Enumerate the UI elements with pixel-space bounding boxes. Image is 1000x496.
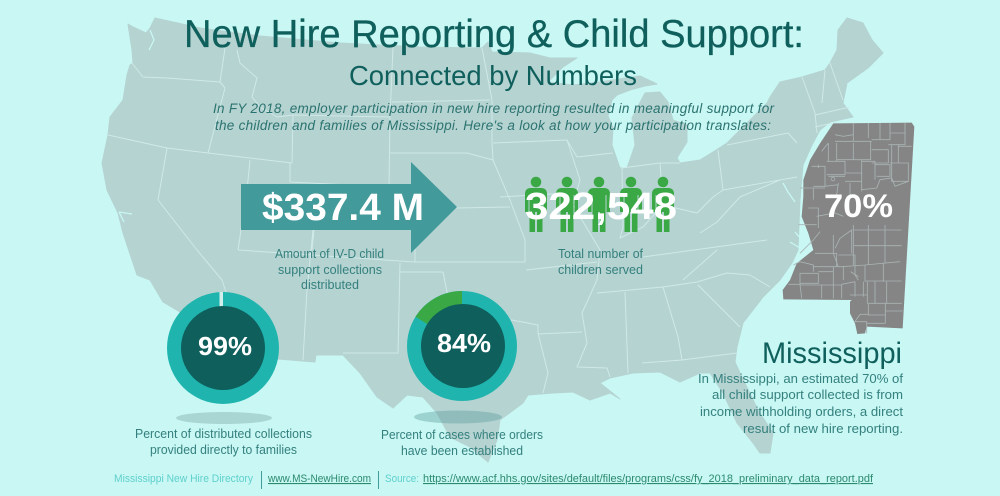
- intro text: the children and families of Mississippi. Here's a look at how your participation translates:: [215, 118, 771, 133]
- Mississippi state map: [783, 123, 914, 334]
- donut 99 label: provided directly to families: [150, 443, 297, 457]
- footer: Source:: [385, 473, 419, 485]
- Mississippi description: result of new hire reporting.: [743, 422, 903, 436]
- footer: [114, 471, 874, 489]
- collections label: distributed: [301, 278, 359, 292]
- donut 84 percent: [407, 291, 517, 424]
- collections label: support collections: [278, 263, 382, 277]
- donut 99 label: Percent of distributed collections: [135, 427, 312, 441]
- US map background: [102, 18, 883, 462]
- footer: Mississippi New Hire Directory: [114, 473, 253, 485]
- Mississippi heading: Mississippi: [762, 337, 902, 370]
- donut 84 label: Percent of cases where orders: [381, 428, 543, 442]
- children served label: [558, 247, 644, 277]
- Mississippi description: In Mississippi, an estimated 70% of: [698, 372, 904, 386]
- icon: five people: [525, 177, 674, 232]
- title: New Hire Reporting & Child Support:: [184, 13, 804, 56]
- collections label: [275, 247, 384, 292]
- Mississippi description: [698, 372, 904, 436]
- children served label: children served: [558, 263, 643, 277]
- footer: https://www.acf.hhs.gov/sites/default/files/programs/css/fy_2018_preliminary_data_report.pdf: [423, 473, 874, 485]
- subtitle: Connected by Numbers: [349, 60, 637, 91]
- Mississippi description: all child support collected is from: [712, 388, 903, 402]
- donut 99 label: [135, 427, 312, 457]
- collections amount: $337.4 M: [262, 187, 424, 229]
- children served number: 322,548: [525, 186, 677, 228]
- donut 84 percent: 84%: [437, 328, 491, 358]
- children served label: Total number of: [558, 247, 644, 261]
- donut 84 label: have been established: [401, 444, 523, 458]
- footer: www.MS-NewHire.com: [267, 473, 371, 485]
- Mississippi description: income withholding orders, a direct: [700, 405, 904, 419]
- collections label: Amount of IV-D child: [275, 247, 384, 261]
- intro text: [213, 101, 774, 133]
- donut 99 percent: [167, 292, 279, 424]
- intro text: In FY 2018, employer participation in new hire reporting resulted in meaningful support for: [213, 101, 774, 116]
- donut 99 percent: 99%: [198, 331, 252, 361]
- Mississippi percentage: 70%: [824, 188, 893, 224]
- arrow: collections: [241, 162, 457, 253]
- donut 84 label: [381, 428, 543, 458]
